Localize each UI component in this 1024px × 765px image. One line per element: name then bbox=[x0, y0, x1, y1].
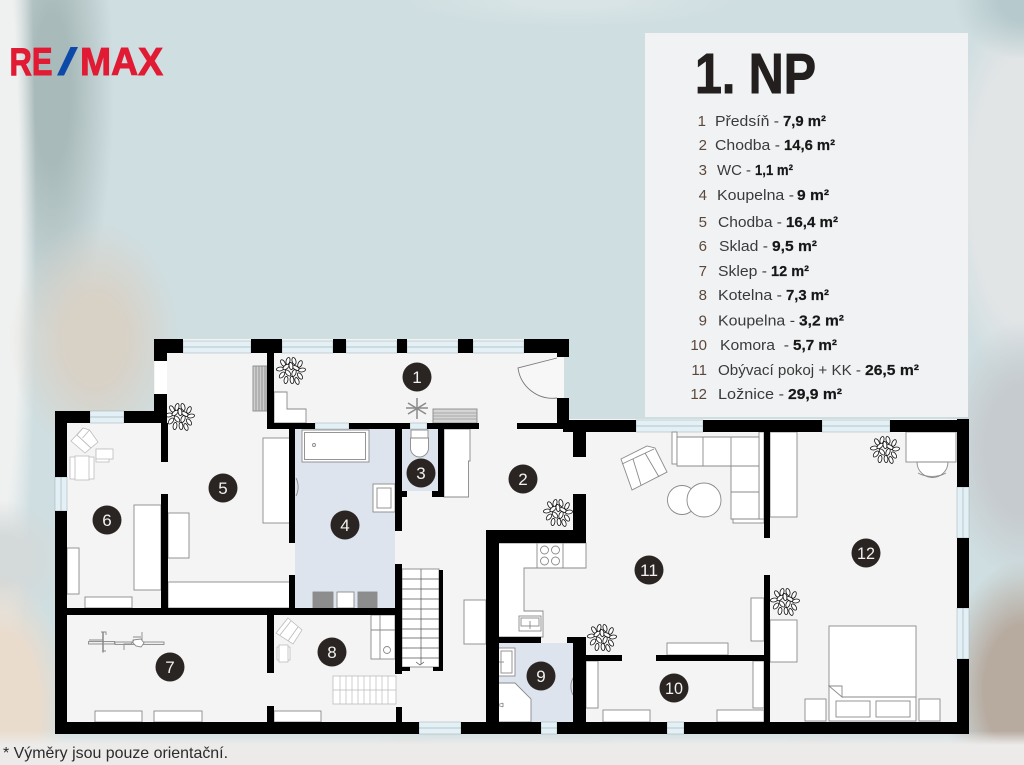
legend row 12: Ložnice - bbox=[718, 386, 784, 403]
walls bbox=[55, 339, 969, 734]
legend row 4: Koupelna - bbox=[717, 187, 794, 204]
room 6 furniture bbox=[67, 428, 161, 608]
room 9 furniture bbox=[495, 648, 573, 722]
legend row 6: 6 bbox=[699, 238, 707, 255]
legend row 2 bbox=[699, 137, 835, 154]
badge 2 bbox=[508, 464, 538, 494]
room 3 toilet bbox=[410, 430, 428, 457]
badge 1 bbox=[402, 362, 432, 392]
badge 7: 7 bbox=[165, 658, 175, 677]
badge 4: 4 bbox=[340, 516, 350, 535]
badge 1: 1 bbox=[412, 368, 422, 387]
room number badges bbox=[92, 362, 880, 702]
legend row 12: 12 bbox=[690, 386, 707, 403]
badge 2: 2 bbox=[518, 470, 528, 489]
badge 10: 10 bbox=[665, 679, 683, 698]
legend row 3 bbox=[699, 162, 793, 179]
legend row 5: 16,4 m² bbox=[786, 214, 838, 231]
badge 3 bbox=[406, 458, 436, 488]
legend row 11: 11 bbox=[691, 362, 707, 379]
legend row 3: WC - bbox=[717, 162, 751, 179]
badge 9: 9 bbox=[536, 667, 546, 686]
room 1 furniture bbox=[274, 357, 564, 423]
room 12 furniture bbox=[770, 432, 956, 721]
badge 4 bbox=[330, 510, 360, 540]
badge 3: 3 bbox=[416, 464, 426, 483]
legend row 6 bbox=[699, 238, 817, 255]
floor plan bbox=[55, 339, 969, 734]
badge 12: 12 bbox=[857, 544, 875, 563]
kitchen bbox=[498, 543, 586, 637]
room 10 furniture bbox=[586, 661, 764, 722]
badge 6: 6 bbox=[102, 511, 112, 530]
badge 7 bbox=[156, 652, 184, 682]
badge 11: 11 bbox=[640, 561, 658, 580]
room 4 furniture bbox=[296, 430, 395, 608]
legend row 7 bbox=[699, 263, 809, 280]
badge 6 bbox=[92, 506, 122, 534]
legend row 10 bbox=[690, 337, 837, 354]
legend row 10: 10 bbox=[690, 337, 707, 354]
legend row 7: 12 m² bbox=[771, 263, 809, 280]
legend row 4 bbox=[699, 187, 829, 204]
room 8 furniture bbox=[274, 615, 396, 722]
logo: RE/MAX: MAX bbox=[80, 41, 163, 84]
room 5 furniture bbox=[165, 366, 290, 608]
legend row 6: Sklad - bbox=[719, 238, 768, 255]
logo: RE/MAX bbox=[10, 41, 163, 84]
legend row 9: 3,2 m² bbox=[799, 312, 844, 330]
legend row 9: Koupelna - bbox=[718, 312, 795, 330]
legend row 2: Chodba - bbox=[715, 137, 780, 154]
panel: room legend bbox=[645, 33, 968, 417]
legend row 5: 5 bbox=[699, 214, 707, 231]
legend row 3: 1,1 m² bbox=[755, 162, 793, 179]
logo: RE/MAX: RE bbox=[10, 41, 52, 84]
floor bbox=[55, 339, 969, 734]
legend row 10: Komora - bbox=[720, 337, 789, 354]
legend row 4: 9 m² bbox=[797, 187, 829, 204]
windows bbox=[55, 341, 969, 734]
legend row 10: 5,7 m² bbox=[793, 337, 837, 354]
legend row 12: 29,9 m² bbox=[788, 386, 842, 403]
badge 5 bbox=[208, 474, 238, 502]
bathroom floors bbox=[295, 429, 573, 722]
door gap: room 5 bbox=[155, 361, 167, 394]
legend row 12 bbox=[690, 386, 842, 403]
heading: 1. NP: 1. NP bbox=[695, 42, 816, 106]
legend row 8 bbox=[699, 287, 829, 304]
legend row 5: Chodba - bbox=[718, 214, 782, 231]
room 7 furniture bbox=[88, 632, 202, 722]
room 2 furniture bbox=[444, 429, 573, 527]
legend row 2: 2 bbox=[699, 137, 707, 154]
badge 5: 5 bbox=[218, 479, 228, 498]
badge 12 bbox=[852, 538, 880, 568]
legend row 1: Předsíň - bbox=[715, 113, 779, 130]
legend row 9 bbox=[699, 312, 844, 330]
legend row 1: 1 bbox=[698, 113, 706, 130]
legend row 1: 7,9 m² bbox=[783, 113, 826, 130]
badge 8: 8 bbox=[327, 643, 337, 662]
legend row 4: 4 bbox=[699, 187, 707, 204]
legend row 1 bbox=[698, 113, 826, 130]
badge 11 bbox=[634, 556, 664, 584]
legend row 7: Sklep - bbox=[718, 263, 767, 280]
legend row 11 bbox=[691, 362, 919, 379]
legend row 9: 9 bbox=[699, 312, 707, 330]
badge 10 bbox=[660, 674, 688, 702]
legend row 3: 3 bbox=[699, 162, 707, 179]
legend row 2: 14,6 m² bbox=[784, 137, 835, 154]
footnote: * Výměry jsou pouze orientační. bbox=[3, 745, 228, 762]
room 11 furniture bbox=[587, 432, 764, 655]
legend row 8: 7,3 m² bbox=[786, 287, 829, 304]
legend row 6: 9,5 m² bbox=[772, 238, 817, 255]
legend row 11: 26,5 m² bbox=[865, 362, 919, 379]
legend row 8: Kotelna - bbox=[718, 287, 782, 304]
legend row 7: 7 bbox=[699, 263, 707, 280]
hall stairs bbox=[402, 569, 486, 667]
legend row 8: 8 bbox=[699, 287, 707, 304]
badge 9 bbox=[526, 662, 556, 690]
legend row 5 bbox=[699, 214, 838, 231]
legend row 11: Obývací pokoj + KK - bbox=[718, 362, 861, 379]
badge 8 bbox=[318, 638, 346, 666]
